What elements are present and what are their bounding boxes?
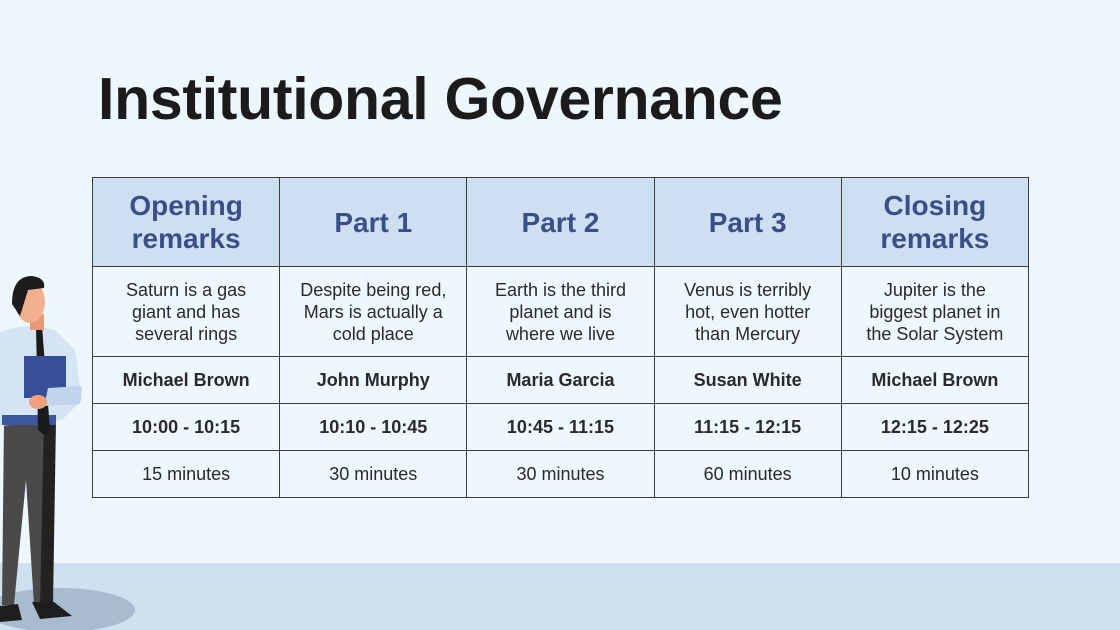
schedule table: cold place — [333, 324, 414, 344]
schedule table: 10 minutes — [891, 464, 979, 484]
schedule table: Michael Brown — [871, 370, 998, 390]
schedule table: 10:10 - 10:45 — [319, 417, 427, 437]
schedule table: the Solar System — [866, 324, 1003, 344]
schedule table: Jupiter is the — [884, 280, 986, 300]
schedule table: 10:00 - 10:15 — [132, 417, 240, 437]
schedule table — [92, 177, 1029, 498]
schedule table: 30 minutes — [516, 464, 604, 484]
title: Institutional Governance — [98, 66, 783, 132]
schedule table: Saturn is a gas — [126, 280, 246, 300]
schedule table: than Mercury — [695, 324, 800, 344]
schedule table: several rings — [135, 324, 237, 344]
schedule table: where we live — [506, 324, 615, 344]
illustration: businessman — [0, 276, 135, 630]
schedule table: Part 1 — [334, 206, 412, 238]
schedule table: Opening — [129, 190, 243, 221]
schedule table: planet and is — [509, 302, 612, 322]
schedule table: giant and has — [132, 302, 240, 322]
schedule table: biggest planet in — [869, 302, 1000, 322]
schedule table: Part 2 — [522, 206, 599, 238]
schedule table: Despite being red, — [300, 280, 446, 300]
schedule table: 15 minutes — [142, 464, 230, 484]
schedule table: Venus is terribly — [684, 280, 811, 300]
schedule table: remarks — [880, 223, 989, 254]
schedule table: Mars is actually a — [304, 302, 443, 322]
schedule table: Part 3 — [709, 206, 787, 238]
schedule table: 60 minutes — [704, 464, 792, 484]
schedule table: Susan White — [694, 370, 802, 390]
schedule table: 11:15 - 12:15 — [694, 417, 801, 437]
schedule table: 30 minutes — [329, 464, 417, 484]
schedule table: 12:15 - 12:25 — [881, 417, 989, 437]
schedule table: John Murphy — [317, 370, 430, 390]
schedule table: Michael Brown — [123, 370, 250, 390]
schedule table: hot, even hotter — [685, 302, 810, 322]
schedule table: remarks — [132, 223, 241, 254]
schedule table: Earth is the third — [495, 280, 626, 300]
schedule table: Maria Garcia — [506, 370, 614, 390]
schedule table: 10:45 - 11:15 — [507, 417, 614, 437]
schedule table: Closing — [884, 190, 986, 221]
